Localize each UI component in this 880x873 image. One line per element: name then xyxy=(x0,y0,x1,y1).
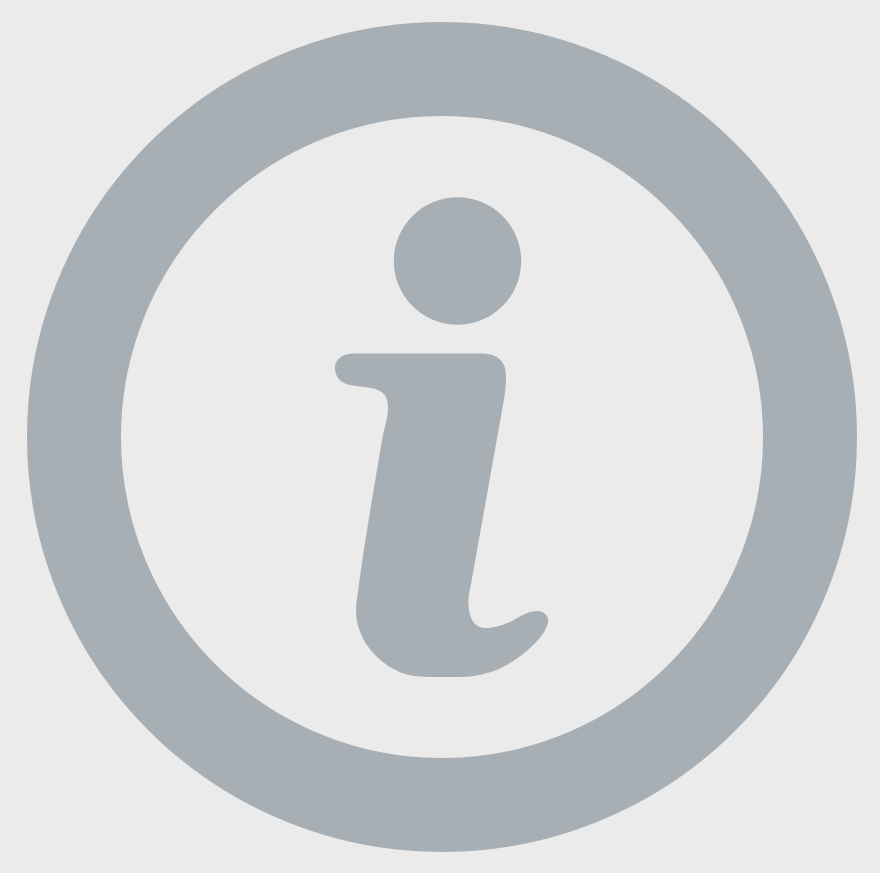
icon: stem of the letter i xyxy=(335,354,548,677)
icon: dot of the letter i xyxy=(394,197,521,325)
icon: outer ring xyxy=(74,69,810,805)
